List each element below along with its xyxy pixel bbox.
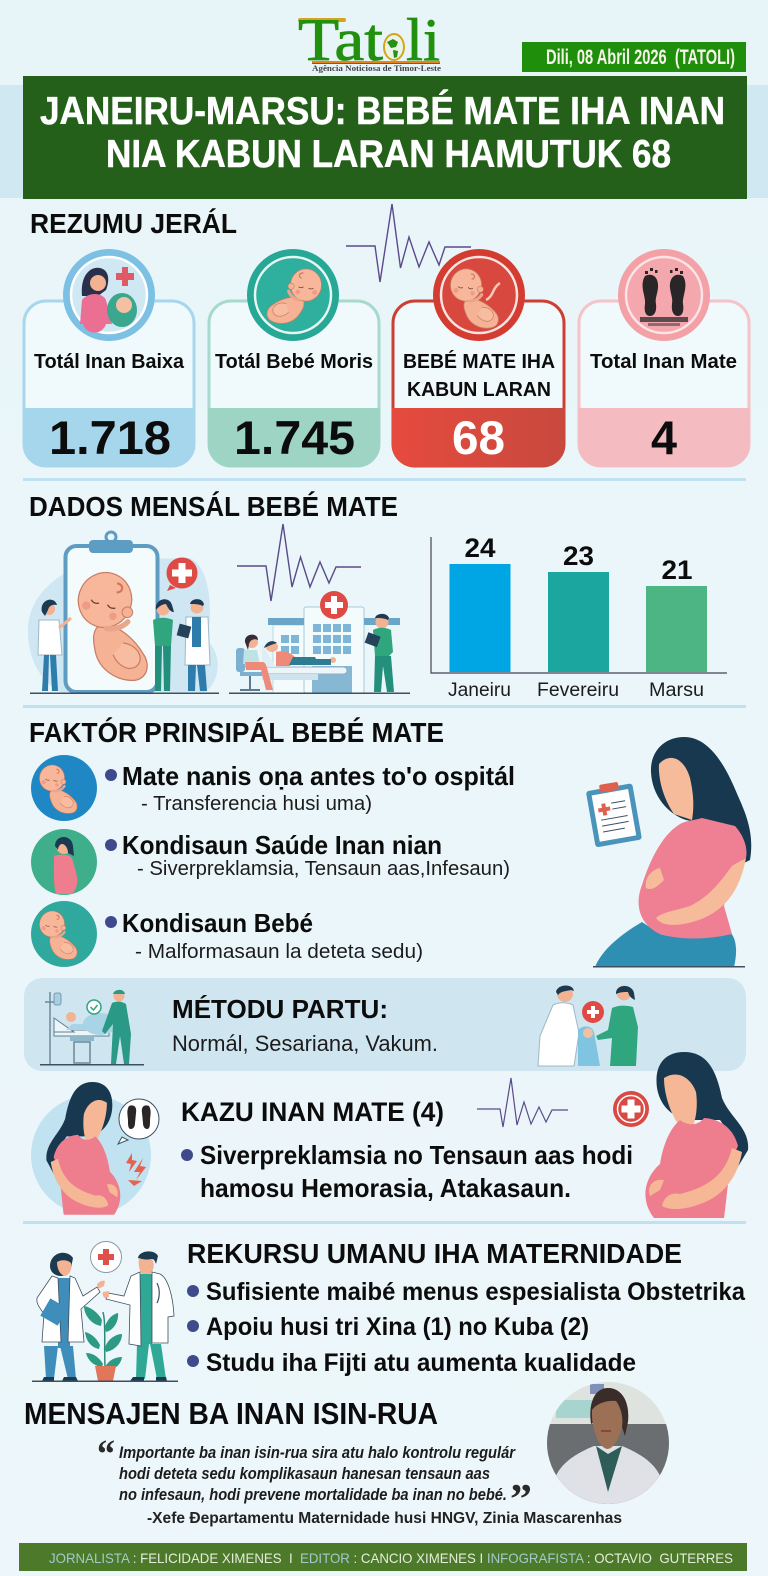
title banner: NIA KABUN LARAN HAMUTUK 68 xyxy=(106,133,671,176)
card: bebé mate iha kabun laran xyxy=(392,249,565,467)
list: human resources: Studu iha Fijti atu aumenta kualidade xyxy=(206,1349,636,1377)
factor: kondisaun bebé: - Malformasaun la deteta sedu) xyxy=(135,941,423,963)
illustration: pregnant woman standing xyxy=(645,1052,748,1218)
bar: Janeiru: 24 xyxy=(464,533,496,563)
panel: summary cards xyxy=(23,249,750,467)
factor: kondisaun saúde inan: Kondisaun Saúde Inan nian xyxy=(122,830,442,860)
quote: ” xyxy=(510,1477,532,1523)
card: bebé mate iha kabun laran: BEBÉ MATE IHA xyxy=(403,350,555,373)
bar: Marsu: Marsu xyxy=(649,680,704,701)
text: maternal causes: hamosu Hemorasia, Atakasaun. xyxy=(200,1173,571,1203)
text: delivery methods: Normál, Sesariana, Vakum. xyxy=(172,1031,438,1056)
quote: hodi deteta sedu komplikasaun hanesan tensaun aas xyxy=(119,1464,490,1483)
figure: doctor xyxy=(38,600,71,691)
card: total bebé moris xyxy=(208,249,380,467)
illustration: delivery bed xyxy=(40,990,144,1066)
figure: female doctor xyxy=(37,1253,105,1381)
bar: Janeiru: Janeiru xyxy=(448,680,511,701)
heading: rezumu jerál: REZUMU JERÁL xyxy=(30,208,237,239)
factor: mate nanis: - Transferencia husi uma) xyxy=(141,793,372,815)
figure: doctor with clipboard xyxy=(177,599,210,691)
heading: kazu inan mate: KAZU INAN MATE (4) xyxy=(181,1097,444,1127)
list: human resources: Sufisiente maibé menus espesialista Obstetrika xyxy=(206,1278,746,1306)
list: human resources xyxy=(187,1278,746,1377)
text: maternal causes xyxy=(181,1140,633,1203)
figure: male doctor xyxy=(103,1251,174,1381)
illustration: clipboard baby with medical staff xyxy=(28,532,219,694)
card: total inan baixa: 1.718 xyxy=(49,411,171,464)
heading: faktór prinsipál: FAKTÓR PRINSIPÁL BEBÉ MATE xyxy=(29,717,444,748)
logo: Tatoli: Agência Noticiosa de Timor-Leste xyxy=(312,63,441,73)
quote attribution: -Xefe Ɖepartamentu Maternidade husi HNGV, Zinia Mascarenhas xyxy=(147,1510,622,1527)
illustration: pregnant woman seated with clipboard xyxy=(585,737,751,968)
panel: métodu partu xyxy=(24,978,746,1071)
factor: kondisaun saúde inan: - Siverpreklamsia, Tensaun aas,Infesaun) xyxy=(137,858,510,880)
bar: Fevereiru: 23 xyxy=(563,541,594,571)
quote: no infesaun, hodi prevene mortalidade ba inan no bebé. xyxy=(119,1485,507,1504)
factor: kondisaun saúde inan xyxy=(31,829,510,895)
bar: Fevereiru xyxy=(537,541,619,701)
card: bebé mate iha kabun laran: 68 xyxy=(452,411,505,464)
icon: medical cross xyxy=(613,1091,649,1127)
heading: métodu partu: MÉTODU PARTU: xyxy=(172,994,388,1024)
bar chart: monthly deaths xyxy=(431,533,727,701)
date badge xyxy=(522,42,746,72)
footer credits: JORNALISTA : FELICIDADE XIMENES I EDITOR : CANCIO XIMENES I INFOGRAFISTA : OCTAVIO GUTERRES xyxy=(49,1550,733,1566)
bar: Fevereiru: Fevereiru xyxy=(537,680,619,701)
bar: Janeiru xyxy=(448,533,511,701)
card: total bebé moris: Totál Bebé Moris xyxy=(215,351,373,373)
text: maternal causes: Siverpreklamsia no Tensaun aas hodi xyxy=(200,1140,633,1170)
title banner xyxy=(23,76,747,199)
logo: Tatoli: li xyxy=(406,7,440,73)
factor: mate nanis xyxy=(31,755,515,821)
footer credits xyxy=(19,1543,747,1571)
icon: heartbeat line xyxy=(477,1078,568,1127)
bar: Marsu: 21 xyxy=(662,555,692,585)
illustration: doctor and nurse with child xyxy=(538,985,638,1066)
factor: kondisaun bebé xyxy=(31,901,423,967)
card: bebé mate iha kabun laran: KABUN LARAN xyxy=(407,379,551,401)
card: total inan mate xyxy=(578,249,750,467)
icon: footprint bubble xyxy=(118,1099,159,1144)
heading: dados mensál: DADOS MENSÁL BEBÉ MATE xyxy=(29,491,398,522)
logo: Tatoli xyxy=(298,7,441,73)
illustration: two doctors and plant xyxy=(32,1242,178,1382)
figure: nurse xyxy=(153,599,174,691)
illustration: pregnant woman with warning xyxy=(31,1082,159,1215)
factor: kondisaun bebé: Kondisaun Bebé xyxy=(122,908,313,938)
card: total inan baixa: Totál Inan Baixa xyxy=(34,351,185,373)
factor: mate nanis: Mate nanis oṇa antes to'o ospitál xyxy=(122,761,515,791)
card: total inan baixa xyxy=(23,249,195,467)
quote: “ xyxy=(97,1431,115,1476)
list: human resources: Apoiu husi tri Xina (1) no Kuba (2) xyxy=(206,1313,589,1341)
photo: department head xyxy=(547,1382,669,1504)
icon: medical clipboard xyxy=(585,779,642,848)
icon: heartbeat line xyxy=(237,524,361,601)
heading: mensajen: MENSAJEN BA INAN ISIN-RUA xyxy=(24,1396,438,1431)
bar: Marsu xyxy=(646,555,707,701)
card: total bebé moris: 1.745 xyxy=(234,411,355,464)
logo: Tatoli: Tat xyxy=(298,7,383,73)
card: total inan mate: 4 xyxy=(651,411,677,464)
card: total inan mate: Total Inan Mate xyxy=(590,351,737,373)
icon: potted plant xyxy=(84,1306,122,1381)
quote: Importante ba inan isin-rua sira atu halo kontrolu regulár xyxy=(119,1443,516,1462)
heading: rekursu umanu: REKURSU UMANU IHA MATERNIDADE xyxy=(187,1238,682,1269)
illustration: hospital with patient xyxy=(229,591,410,694)
quote xyxy=(97,1431,532,1523)
icon: heartbeat line xyxy=(346,204,471,282)
